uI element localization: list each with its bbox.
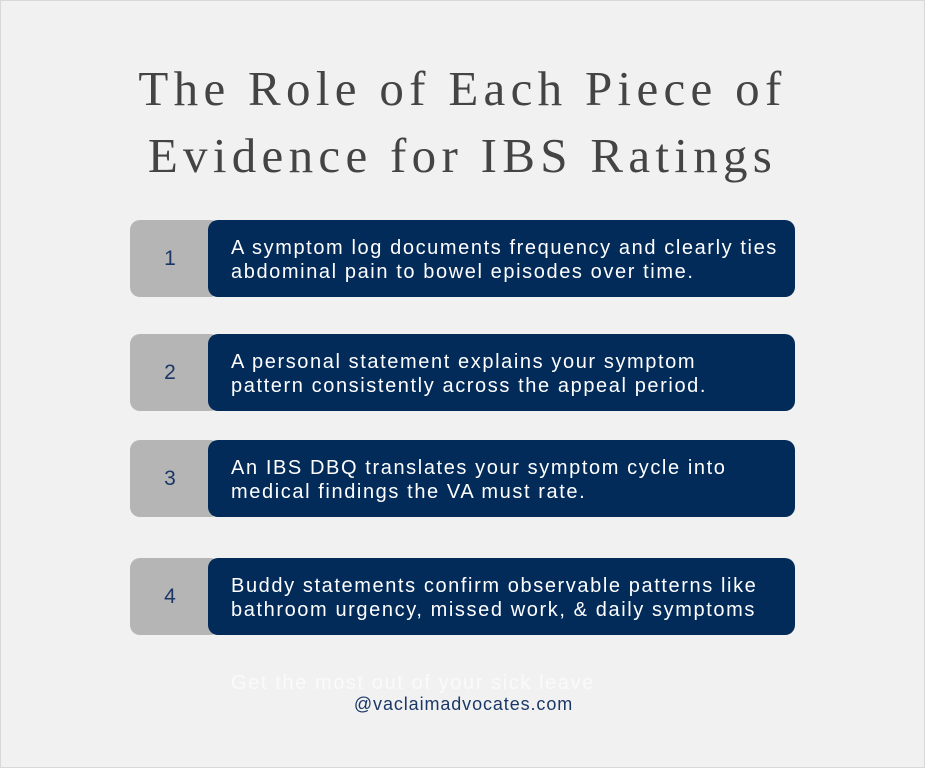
title: The Role of Each Piece of	[138, 61, 787, 116]
item 3	[130, 440, 795, 517]
item 4	[130, 558, 795, 635]
item 1: abdominal pain to bowel episodes over time.	[231, 261, 694, 283]
item 1	[130, 220, 795, 297]
title: Evidence for IBS Ratings	[148, 128, 777, 183]
item 1: A symptom log documents frequency and clearly ties	[231, 237, 778, 259]
item 4: 4	[164, 585, 176, 608]
item 2: A personal statement explains your symptom	[231, 351, 696, 373]
item 3: 3	[164, 467, 176, 490]
item 2: pattern consistently across the appeal period.	[231, 375, 707, 397]
item 3: An IBS DBQ translates your symptom cycle into	[231, 457, 726, 479]
item 2	[130, 334, 795, 411]
handle: @vaclaimadvocates.com	[354, 694, 573, 714]
item 4: Buddy statements confirm observable patterns like	[231, 575, 757, 597]
title	[138, 61, 787, 183]
item 4: bathroom urgency, missed work, & daily symptoms	[231, 599, 756, 621]
item 3: medical findings the VA must rate.	[231, 481, 586, 503]
faint tagline: Get the most out of your sick leave	[231, 672, 595, 694]
item 1: 1	[164, 247, 176, 270]
item 2: 2	[164, 361, 176, 384]
